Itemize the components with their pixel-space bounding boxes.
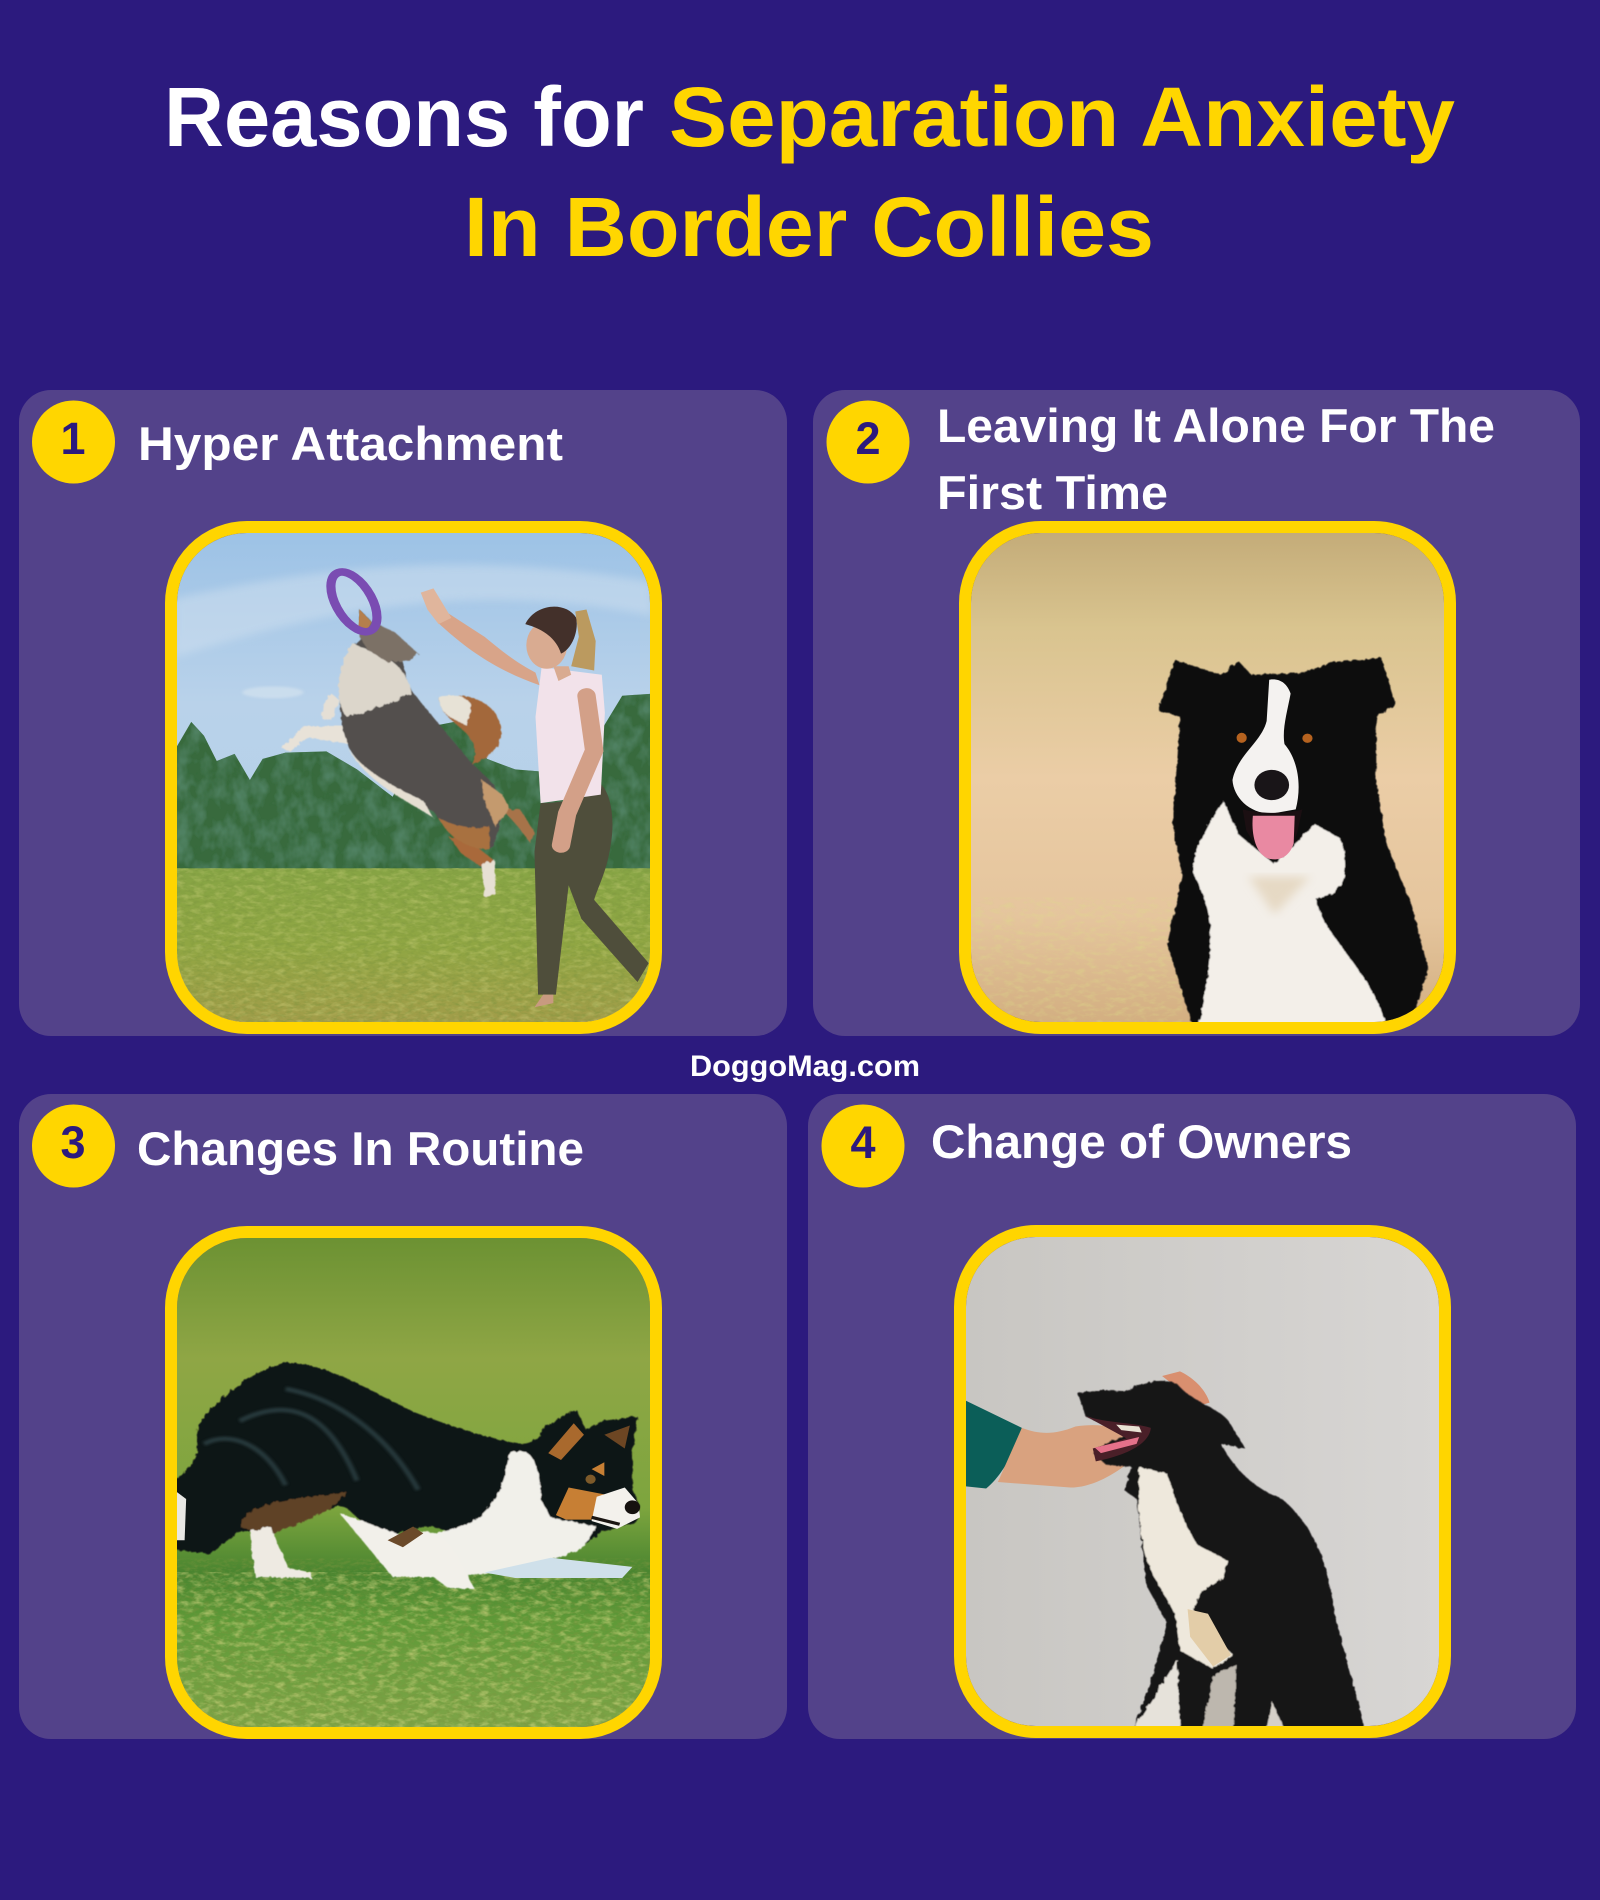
- number badge 4: [822, 1104, 904, 1188]
- photo frame 1: [171, 527, 656, 1028]
- number badge 1: [32, 400, 115, 484]
- number badge 3: 3: [60, 1117, 86, 1168]
- number badge 2: 2: [855, 413, 881, 464]
- dog body: [173, 1362, 640, 1589]
- photo frame 2: [965, 527, 1450, 1028]
- heading 4: Change of Owners: [931, 1115, 1352, 1168]
- woman: [534, 784, 649, 995]
- face markings: [1232, 679, 1299, 814]
- photo frame 3: [171, 1232, 656, 1733]
- panel 3: changes in routine: [19, 1094, 787, 1739]
- photo frame 4: [960, 1231, 1445, 1732]
- chest shadow: [1249, 877, 1310, 915]
- number badge 3: [32, 1104, 115, 1188]
- title: In Border Collies: [464, 180, 1154, 274]
- heading 1: Hyper Attachment: [138, 417, 563, 470]
- ring toy: [326, 568, 382, 636]
- number badge 4: 4: [850, 1117, 876, 1168]
- dog: [282, 609, 534, 897]
- photo: collie crouching on grass: [173, 1235, 655, 1731]
- panel 2: leaving it alone: [813, 390, 1580, 1036]
- dog: [1078, 1381, 1365, 1728]
- watermark: DoggoMag.com: [690, 1050, 920, 1083]
- number badge 2: [826, 400, 910, 484]
- grass: [173, 868, 655, 1026]
- title: Reasons for: [164, 70, 644, 164]
- number badge 1: 1: [60, 413, 86, 464]
- open mouth: [1085, 1415, 1151, 1461]
- heading 2: First Time: [937, 466, 1168, 519]
- face: [556, 1488, 604, 1520]
- heading 3: Changes In Routine: [137, 1122, 584, 1175]
- title: Separation Anxiety: [669, 70, 1455, 164]
- heading 2: [937, 399, 1495, 519]
- sleeve and arm: [963, 1399, 1022, 1488]
- photo: woman playing with jumping collie: [173, 529, 655, 1026]
- fur sheen: [204, 1389, 418, 1490]
- heading 2: Leaving It Alone For The: [937, 399, 1495, 452]
- hand on head: [1162, 1371, 1210, 1406]
- dog body: [1159, 658, 1428, 1026]
- title: [164, 70, 1455, 274]
- photo: black and white collie in a field: [963, 529, 1453, 1026]
- tree line: [173, 694, 653, 879]
- panel 4: change of owners: [808, 1094, 1576, 1739]
- panel 1: hyper attachment: [19, 390, 787, 1036]
- photo: hand petting a black collie: [963, 1235, 1445, 1731]
